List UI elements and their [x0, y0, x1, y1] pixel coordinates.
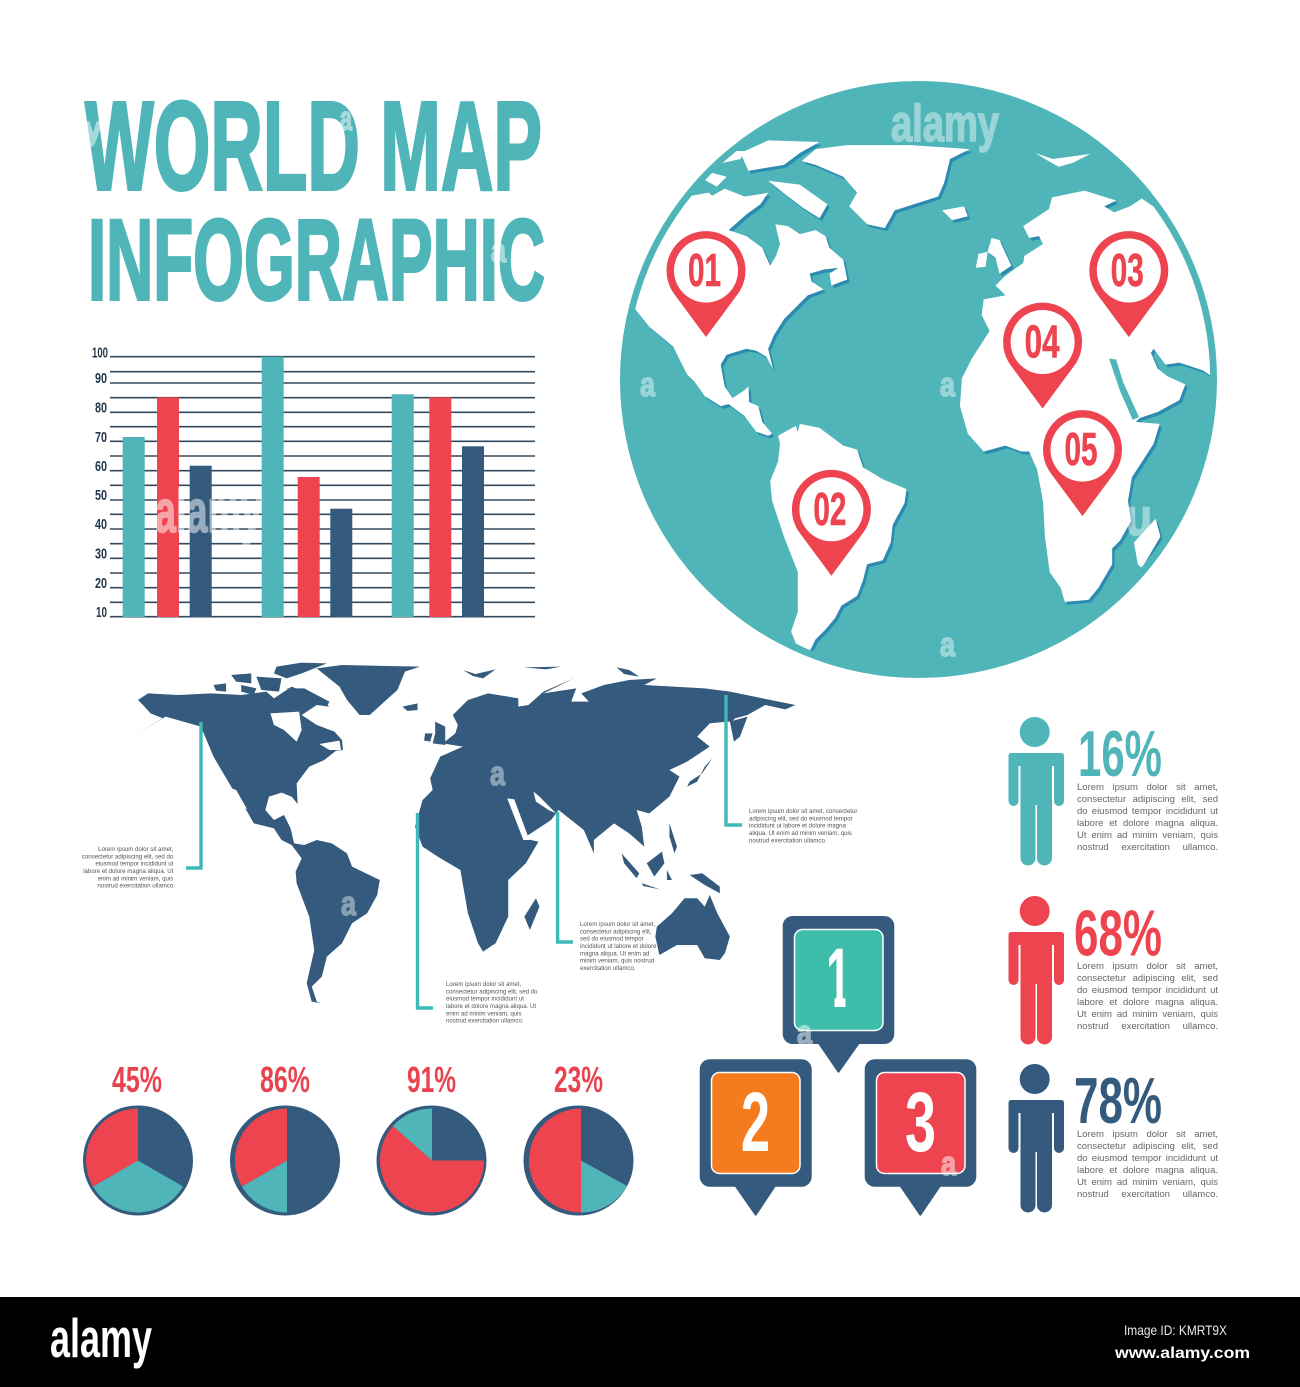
- callout: north america: eiusmod tempor incididunt ut: [95, 861, 174, 868]
- callout: africa: labore et dolore magna aliqua. Ut: [446, 1003, 536, 1010]
- pie chart 86%: 86%: [260, 1059, 310, 1100]
- text block 68%: labore et dolore magna aliqua.: [1077, 997, 1218, 1008]
- callout: east asia: incididunt ut labore et dolore magna: [749, 823, 846, 830]
- square pin 2: 2: [741, 1075, 770, 1169]
- pie chart 45%: [83, 1059, 193, 1216]
- callout: east asia: aliqua. Ut enim ad minim veniam, quis: [749, 830, 852, 837]
- map pin 04: [1003, 303, 1082, 408]
- callout: north america: Lorem ipsum dolor sit amet,: [98, 846, 174, 853]
- map watermarks: a: [341, 885, 357, 923]
- text block 16%: do eiusmod tempor incididunt ut: [1077, 806, 1218, 817]
- text block 16%: [1077, 782, 1218, 853]
- text block 16%: Lorem ipsum dolor sit amet,: [1077, 782, 1218, 793]
- pie chart 23%: [524, 1059, 634, 1216]
- globe watermarks: u: [1126, 489, 1152, 547]
- text block 78%: consectetur adipiscing elit, sed: [1077, 1141, 1218, 1152]
- globe: [620, 81, 1245, 678]
- watermarks: [84, 100, 957, 1183]
- callout: south asia: consectetur adipiscing elit,: [580, 928, 652, 935]
- stat 16%: 16%: [1078, 717, 1162, 790]
- watermarks: a: [941, 1145, 957, 1183]
- map inland seas: [231, 712, 556, 840]
- text block 68%: do eiusmod tempor incididunt ut: [1077, 985, 1218, 996]
- callout: north america: [82, 722, 201, 890]
- callout: east asia: adipiscing elit, sed do eiusmod tempor: [749, 815, 853, 822]
- text block 68%: nostrud exercitation ullamco.: [1077, 1021, 1218, 1032]
- square pin 3: [865, 1059, 976, 1216]
- map pin 03: [1089, 231, 1168, 337]
- callout: africa: Lorem ipsum dolor sit amet,: [446, 981, 521, 988]
- square pin 1: 1: [826, 931, 851, 1025]
- text block 68%: consectetur adipiscing elit, sed: [1077, 973, 1218, 984]
- callout: north america: enim ad minim veniam, quis: [98, 875, 173, 882]
- text block 78%: Ut enim ad minim veniam, quis: [1077, 1177, 1218, 1188]
- map watermarks: [341, 755, 506, 923]
- map pin 03: 03: [1111, 244, 1144, 296]
- map pin 02: [792, 470, 871, 576]
- callout: north america: consectetur adipiscing elit, sed do: [82, 853, 174, 860]
- text block 78%: labore et dolore magna aliqua.: [1077, 1165, 1218, 1176]
- pie chart 45%: 45%: [112, 1059, 162, 1100]
- square pin 1: [783, 916, 894, 1073]
- text block 78%: do eiusmod tempor incididunt ut: [1077, 1153, 1218, 1164]
- map pin 05: 05: [1064, 423, 1098, 475]
- callout: north america: nostrud exercitation ullamco.: [97, 883, 175, 890]
- text block 68%: Ut enim ad minim veniam, quis: [1077, 1009, 1218, 1020]
- stat 78%: 78%: [1074, 1064, 1162, 1137]
- globe watermarks: a: [940, 366, 956, 404]
- callout: east asia: Lorem ipsum dolor sit amet, consectetur: [749, 808, 857, 815]
- chart axis labels: 80: [95, 401, 107, 417]
- callout: south asia: incididunt ut labore et dolore: [580, 943, 657, 950]
- map pin 01: [666, 231, 746, 337]
- callout: south asia: minim veniam, quis nostrud: [580, 958, 654, 965]
- world map: [133, 663, 795, 1003]
- bar chart: [92, 346, 535, 621]
- text block 16%: nostrud exercitation ullamco.: [1077, 842, 1218, 853]
- chart axis labels: 90: [95, 371, 107, 387]
- map watermarks: a: [490, 755, 506, 793]
- text block 16%: labore et dolore magna aliqua.: [1077, 818, 1218, 829]
- chart axis labels: 70: [95, 430, 107, 446]
- watermarks: a: [797, 1014, 813, 1052]
- watermarks: y: [84, 110, 102, 148]
- person icon teal: [1008, 717, 1064, 866]
- globe watermarks: [640, 95, 1152, 664]
- text block 16%: consectetur adipiscing elit, sed: [1077, 794, 1218, 805]
- title: INFOGRAPHIC: [88, 196, 545, 324]
- chart axis labels: 100: [92, 346, 108, 362]
- globe watermarks: a: [940, 626, 956, 664]
- callout: africa: nostrud exercitation ullamco.: [446, 1018, 524, 1025]
- square pin 2: [700, 1059, 812, 1216]
- text block 16%: Ut enim ad minim veniam, quis: [1077, 830, 1218, 841]
- map pin 02: 02: [813, 483, 846, 535]
- pie chart 91%: [376, 1059, 486, 1216]
- chart axis labels: 50: [95, 488, 107, 504]
- chart axis labels: [92, 346, 108, 621]
- chart axis labels: 10: [96, 605, 107, 621]
- title: WORLD MAP: [85, 76, 542, 216]
- chart axis labels: 40: [95, 517, 107, 533]
- title: [85, 76, 545, 324]
- callout: africa: [418, 813, 539, 1025]
- chart axis labels: 20: [95, 576, 107, 592]
- text block 78%: Lorem ipsum dolor sit amet,: [1077, 1129, 1218, 1140]
- callout: south asia: Lorem ipsum dolor sit amet,: [580, 921, 655, 928]
- pie chart 91%: 91%: [407, 1059, 456, 1100]
- callout: africa: eiusmod tempor incididunt ut: [446, 996, 524, 1003]
- red sea and gulf of california: [1109, 358, 1139, 420]
- text block 68%: Lorem ipsum dolor sit amet,: [1077, 961, 1218, 972]
- callout: africa: consectetur adipiscing elit, sed do: [446, 988, 538, 995]
- watermarks: a: [491, 232, 507, 270]
- person icon red: [1008, 896, 1064, 1044]
- footer bar: [0, 1297, 1300, 1387]
- pie chart 86%: [230, 1059, 340, 1216]
- callout: south asia: magna aliqua. Ut enim ad: [580, 950, 649, 957]
- map pin 01: 01: [688, 244, 721, 296]
- watermarks: alamy: [155, 478, 262, 545]
- callout: east asia: [726, 695, 859, 844]
- text block 78%: [1077, 1129, 1218, 1200]
- globe continents: [634, 140, 1245, 654]
- map pin 04: 04: [1025, 316, 1060, 368]
- callout: south asia: exercitation ullamco.: [580, 965, 636, 972]
- callout: south asia: sed do eiusmod tempor: [580, 936, 644, 943]
- chart axis labels: 60: [95, 459, 107, 475]
- footer image id: Image ID: KMRT9X: [1124, 1322, 1228, 1338]
- globe watermarks: a: [640, 366, 656, 404]
- chart axis labels: 30: [95, 547, 107, 563]
- map pin 05: [1043, 410, 1122, 516]
- footer logo: alamy: [50, 1307, 152, 1369]
- pie chart 23%: 23%: [554, 1059, 603, 1100]
- callout: north america: labore et dolore magna aliqua. Ut: [83, 868, 174, 875]
- text block 78%: nostrud exercitation ullamco.: [1077, 1189, 1218, 1200]
- globe watermarks: alamy: [891, 95, 999, 153]
- stat 68%: 68%: [1074, 896, 1162, 970]
- watermarks: a: [340, 100, 353, 138]
- callout: south asia: [558, 812, 658, 972]
- chart bars: [123, 357, 484, 617]
- square pin 3: 3: [905, 1075, 936, 1169]
- footer url: www.alamy.com: [1114, 1345, 1250, 1362]
- person icon navy: [1008, 1064, 1064, 1212]
- callout: africa: enim ad minim veniam, quis: [446, 1010, 522, 1017]
- callout: east asia: nostrud exercitation ullamco.: [749, 837, 827, 844]
- text block 68%: [1077, 961, 1218, 1032]
